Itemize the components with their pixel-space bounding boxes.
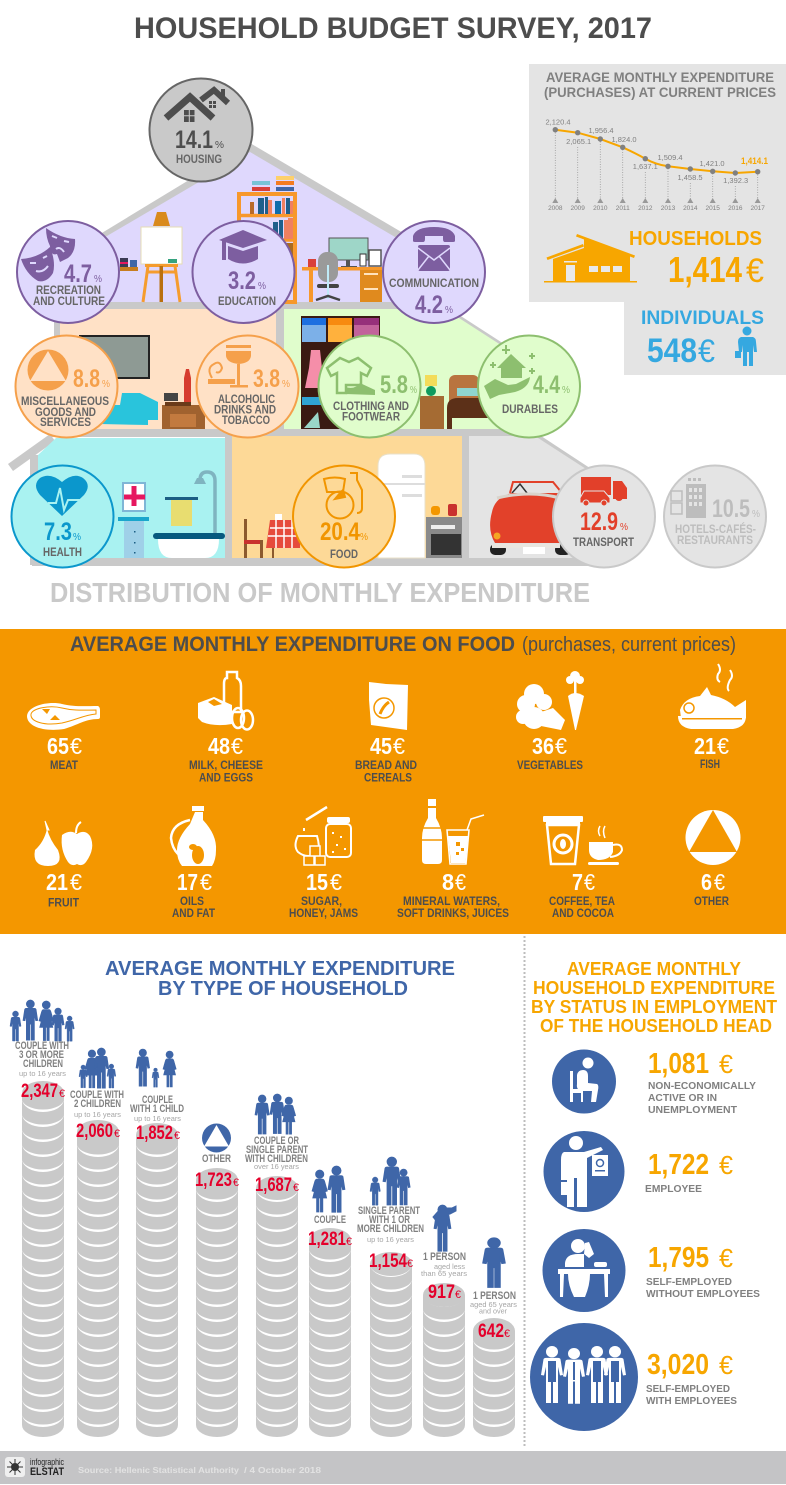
circle: alcoholic drinks and tobacco 3.8%: ALCOHOLIC bbox=[218, 394, 275, 406]
coin stack bbox=[370, 1252, 412, 1437]
line chart: 1,509.4 bbox=[657, 153, 683, 162]
employment row: self-employed with employees: WITH EMPLOYEES bbox=[646, 1395, 737, 1407]
icon: truck and car bbox=[580, 477, 627, 506]
circle: clothing and footwear 5.8%: CLOTHING AND bbox=[333, 401, 409, 413]
column: single parent with 1 or more children: 1,154 bbox=[369, 1251, 407, 1272]
employment row: non-economically active: NON-ECONOMICALLY bbox=[648, 1080, 756, 1092]
item: mineral waters, soft drinks, juices: MINERAL WATERS, bbox=[403, 894, 500, 908]
column: couple or single parent with children: 1,687 bbox=[255, 1175, 292, 1196]
column: couple: COUPLE bbox=[314, 1214, 346, 1226]
column: couple with 1 child: COUPLE bbox=[142, 1094, 173, 1106]
icon: family of five bbox=[10, 1000, 74, 1041]
column: other: OTHER bbox=[202, 1153, 231, 1165]
column: other: 1,723 bbox=[195, 1170, 232, 1191]
heading: expenditure by status in employment: AVERAGE MONTHLY bbox=[567, 958, 742, 979]
employment row: self-employed with employees bbox=[530, 1323, 737, 1431]
column: couple with 2 children: 2,060 bbox=[76, 1121, 113, 1142]
circle: alcoholic drinks and tobacco 3.8%: % bbox=[282, 379, 290, 390]
column: couple with 3 or more children: COUPLE WITH bbox=[15, 1040, 69, 1052]
item: milk, cheese and eggs: 48 bbox=[208, 733, 230, 759]
circle: transport 12.9%: 12.9 bbox=[580, 508, 618, 536]
icon: house bbox=[544, 234, 637, 282]
column: couple with 1 child bbox=[130, 1049, 184, 1437]
room: garage with car bbox=[469, 436, 600, 558]
desk with computer bbox=[302, 238, 382, 302]
item: mineral waters, soft drinks, juices: € bbox=[455, 869, 466, 895]
column: couple with 3 or more children: 2,347 bbox=[21, 1081, 58, 1102]
line chart: 1,392.3 bbox=[723, 176, 748, 185]
line chart: 1,414.1 bbox=[741, 156, 768, 166]
line chart: 2013 bbox=[661, 205, 676, 212]
circle: housing 14.1%: 14.1 bbox=[175, 126, 213, 154]
logo bbox=[5, 1457, 64, 1478]
heading: expenditure by status in employment: BY STATUS IN EMPLOYMENT bbox=[531, 996, 778, 1017]
item: other bbox=[686, 810, 740, 908]
employment row: self-employed without employees: SELF-EMPLOYED bbox=[646, 1276, 732, 1288]
line chart bbox=[545, 118, 768, 212]
item: other: OTHER bbox=[694, 894, 729, 908]
item: vegetables: € bbox=[555, 733, 567, 759]
footer bbox=[0, 1451, 786, 1484]
households figure bbox=[629, 228, 764, 290]
icon: heart with pulse bbox=[36, 476, 88, 516]
item: meat bbox=[27, 703, 100, 772]
icon: fish on plate bbox=[678, 664, 746, 729]
column: 1 person aged less than 65: € bbox=[455, 1289, 461, 1301]
item: mineral waters, soft drinks, juices: 8 bbox=[442, 869, 454, 895]
icon: parent with children bbox=[370, 1157, 410, 1205]
icon: phone and envelope bbox=[413, 227, 455, 271]
house illustration bbox=[8, 143, 602, 566]
employment row: non-economically active: 1,081 bbox=[648, 1048, 709, 1080]
heading: distribution of monthly expenditure: DISTRIBUTION OF MONTHLY EXPENDITURE bbox=[50, 577, 590, 608]
employment row: non-economically active bbox=[552, 1048, 756, 1116]
column: 1 person aged 65 and over: € bbox=[504, 1328, 510, 1340]
employment row: self-employed with employees: € bbox=[719, 1350, 734, 1380]
icon: couple bbox=[312, 1166, 345, 1212]
item: bread and cereals: € bbox=[393, 733, 405, 759]
item: coffee, tea and cocoa: 7 bbox=[572, 869, 583, 895]
item: sugar, honey, jams: € bbox=[330, 869, 342, 895]
item: oils and fat: € bbox=[200, 869, 212, 895]
column: single parent with 1 or more children: WITH 1 OR bbox=[369, 1214, 410, 1226]
icon: food items bbox=[324, 473, 362, 518]
column: single parent with 1 or more children: € bbox=[407, 1258, 413, 1270]
line chart: 2017 bbox=[750, 205, 765, 212]
circle: hotels, cafes, restaurants 10.5%: 10.5 bbox=[712, 495, 750, 523]
coin stack bbox=[309, 1228, 351, 1437]
line chart: 2010 bbox=[593, 205, 608, 212]
room: kitchen bbox=[232, 436, 462, 558]
employment row: self-employed without employees bbox=[542, 1229, 760, 1312]
icon: cup and mug bbox=[543, 816, 622, 865]
coin stack bbox=[256, 1176, 298, 1437]
employment row: employee: EMPLOYEE bbox=[645, 1183, 702, 1195]
circle: clothing and footwear 5.8% bbox=[318, 336, 420, 438]
item: fruit: FRUIT bbox=[48, 896, 80, 910]
item: fish: € bbox=[717, 733, 729, 759]
item: bread and cereals: CEREALS bbox=[364, 770, 412, 784]
column: 1 person aged less than 65: 1 PERSON bbox=[423, 1251, 466, 1263]
icon: hotel building bbox=[671, 478, 706, 518]
icon: person with badge bbox=[544, 1131, 624, 1212]
item: bread and cereals: 45 bbox=[370, 733, 392, 759]
line chart: 1,637.1 bbox=[633, 162, 658, 171]
icon: house on hand bbox=[484, 345, 535, 399]
column: couple with 3 or more children: € bbox=[59, 1088, 65, 1100]
item: fish: FISH bbox=[700, 757, 720, 771]
column: other: € bbox=[233, 1177, 239, 1189]
column: single parent with 1 or more children bbox=[357, 1157, 424, 1437]
column: 1 person aged less than 65: aged less bbox=[434, 1262, 465, 1271]
icon: triangle in circle bbox=[686, 810, 740, 865]
line chart: 1,421.0 bbox=[699, 159, 725, 168]
column: couple or single parent with children: over 16 years bbox=[254, 1162, 299, 1171]
circle: durables 4.4%: 4.4 bbox=[533, 371, 560, 399]
panel heading: AVERAGE MONTHLY EXPENDITURE bbox=[546, 70, 774, 85]
line chart: 2015 bbox=[705, 205, 720, 212]
circle: communication 4.2%: % bbox=[445, 305, 453, 316]
panel heading: (PURCHASES) AT CURRENT PRICES bbox=[544, 85, 776, 100]
circle: recreation and culture 4.7%: 4.7 bbox=[64, 260, 92, 288]
column: couple bbox=[308, 1166, 352, 1437]
item: meat: 65 bbox=[47, 733, 69, 759]
heading: expenditure by status in employment bbox=[531, 958, 778, 1036]
room: bathroom bbox=[38, 438, 225, 558]
icon: person at desk bbox=[542, 1229, 626, 1312]
icon: triangle in circle bbox=[28, 350, 68, 390]
item: meat: MEAT bbox=[50, 758, 79, 772]
employment row: self-employed with employees: SELF-EMPLOYED bbox=[646, 1383, 730, 1395]
column: couple: € bbox=[346, 1236, 352, 1248]
individuals figure bbox=[641, 308, 764, 370]
line chart: 2,120.4 bbox=[545, 118, 571, 126]
circle: miscellaneous 8.8%: GOODS AND bbox=[35, 407, 96, 419]
column: couple with 2 children: € bbox=[114, 1128, 120, 1140]
circle: miscellaneous 8.8%: MISCELLANEOUS bbox=[21, 396, 109, 408]
column: couple with 2 children: COUPLE WITH bbox=[70, 1089, 124, 1101]
roof and walls bbox=[8, 143, 602, 566]
circle: transport 12.9% bbox=[553, 466, 655, 568]
column: couple with 3 or more children: up to 16 years bbox=[19, 1069, 66, 1078]
coin stack bbox=[77, 1120, 119, 1437]
icon: wine glass and cigarette bbox=[208, 345, 251, 388]
circle: hotels, cafes, restaurants 10.5%: RESTAURANTS bbox=[677, 535, 753, 547]
heading: expenditure by type of household: BY TYPE OF HOUSEHOLD bbox=[158, 978, 408, 1000]
heading: expenditure by status in employment: OF THE HOUSEHOLD HEAD bbox=[540, 1015, 772, 1036]
line chart: 2011 bbox=[616, 205, 630, 212]
item: fruit: € bbox=[70, 869, 82, 895]
small shelf with books bbox=[120, 258, 138, 271]
column: couple with 1 child: up to 16 years bbox=[134, 1114, 181, 1123]
heading: expenditure by status in employment: HOUSEHOLD EXPENDITURE bbox=[533, 977, 775, 998]
circle: housing 14.1%: % bbox=[215, 140, 224, 151]
households figure: € bbox=[746, 252, 764, 290]
column: single parent with 1 or more children: SINGLE PARENT bbox=[358, 1205, 420, 1217]
item: milk, cheese and eggs: AND EGGS bbox=[199, 770, 253, 784]
room: living room bbox=[60, 309, 276, 429]
circle: housing 14.1%: HOUSING bbox=[176, 154, 222, 166]
room: attic bbox=[66, 152, 424, 302]
circle: communication 4.2% bbox=[383, 221, 485, 323]
icon: graduation cap bbox=[219, 230, 267, 264]
coin stack bbox=[473, 1318, 515, 1437]
item: fruit bbox=[35, 821, 92, 910]
households figure: 1,414 bbox=[668, 249, 742, 290]
icon: cauliflower and carrot bbox=[516, 671, 584, 730]
icon: bottle and glass bbox=[422, 799, 484, 864]
column: couple with 1 child: WITH 1 CHILD bbox=[130, 1103, 184, 1115]
column: single parent with 1 or more children: MORE CHILDREN bbox=[357, 1223, 424, 1235]
individuals figure: INDIVIDUALS bbox=[641, 308, 764, 329]
circle: health 7.3% bbox=[12, 466, 114, 568]
icon: older person bbox=[483, 1238, 505, 1287]
item: bread and cereals: BREAD AND bbox=[355, 758, 417, 772]
logo: ELSTAT bbox=[30, 1466, 64, 1478]
item: sugar, honey, jams: SUGAR, bbox=[301, 894, 342, 908]
coin stack bbox=[22, 1081, 64, 1437]
line chart: 2009 bbox=[570, 205, 585, 212]
line chart: 2014 bbox=[683, 205, 698, 212]
column: couple with 1 child: 1,852 bbox=[136, 1123, 173, 1144]
icon: oil bottle bbox=[171, 806, 216, 866]
employment row: self-employed without employees: WITHOUT EMPLOYEES bbox=[646, 1288, 760, 1300]
circle: education 3.2%: EDUCATION bbox=[218, 296, 276, 308]
item: coffee, tea and cocoa: AND COCOA bbox=[552, 906, 614, 920]
item: mineral waters, soft drinks, juices bbox=[397, 799, 509, 920]
item: other: 6 bbox=[701, 869, 712, 895]
column: 1 person aged less than 65 bbox=[421, 1205, 467, 1437]
item: meat: € bbox=[70, 733, 82, 759]
line chart: 1,458.5 bbox=[677, 173, 703, 182]
item: fish bbox=[678, 664, 746, 771]
icon: employer with staff bbox=[530, 1323, 638, 1431]
circle: clothing and footwear 5.8%: 5.8 bbox=[380, 371, 408, 399]
icon: adults with grown child bbox=[255, 1094, 296, 1134]
icon: family of four bbox=[79, 1048, 116, 1088]
circle: alcoholic drinks and tobacco 3.8%: TOBACCO bbox=[222, 415, 270, 427]
column: other bbox=[195, 1124, 239, 1437]
line chart: 1,956.4 bbox=[588, 126, 614, 135]
column: couple: 1,281 bbox=[308, 1229, 346, 1250]
icon: person with camera bbox=[433, 1205, 456, 1251]
circle: hotels, cafes, restaurants 10.5% bbox=[664, 466, 766, 568]
circle: durables 4.4%: % bbox=[562, 385, 570, 396]
item: milk, cheese and eggs bbox=[189, 672, 263, 784]
circle: durables 4.4% bbox=[478, 336, 580, 438]
source line: Source: Hellenic Statistical Authority bbox=[78, 1465, 239, 1475]
item: vegetables: 36 bbox=[532, 733, 554, 759]
circle: alcoholic drinks and tobacco 3.8%: 3.8 bbox=[253, 365, 280, 393]
line chart: 1,824.0 bbox=[611, 135, 637, 144]
column: couple with 1 child: € bbox=[174, 1130, 180, 1142]
circle: health 7.3%: % bbox=[73, 532, 81, 543]
circle: transport 12.9%: % bbox=[620, 522, 628, 533]
circle: clothing and footwear 5.8%: % bbox=[410, 385, 417, 396]
circle: housing 14.1% bbox=[150, 78, 252, 182]
easel bbox=[141, 212, 182, 302]
circle: food 20.4%: FOOD bbox=[330, 549, 358, 561]
column: couple or single parent with children: WITH CHILDREN bbox=[245, 1153, 308, 1165]
column: 1 person aged 65 and over bbox=[470, 1238, 517, 1437]
source line bbox=[78, 1465, 321, 1475]
circle: hotels, cafes, restaurants 10.5%: HOTELS-CAFÉS- bbox=[675, 523, 756, 536]
circle: food 20.4%: 20.4 bbox=[320, 518, 360, 546]
icon: honey, jam and sugar cubes bbox=[296, 807, 351, 865]
item: sugar, honey, jams bbox=[289, 807, 358, 920]
item: coffee, tea and cocoa: € bbox=[584, 869, 595, 895]
column: 1 person aged less than 65: 917 bbox=[428, 1282, 455, 1303]
column: 1 person aged 65 and over: and over bbox=[479, 1306, 507, 1316]
title: HOUSEHOLD BUDGET SURVEY, 2017 bbox=[134, 12, 652, 45]
circle: alcoholic drinks and tobacco 3.8%: DRINKS AND bbox=[214, 404, 276, 416]
employment row: employee: € bbox=[719, 1150, 734, 1180]
heading: expenditure by type of household: AVERAGE MONTHLY EXPENDITURE bbox=[105, 958, 455, 980]
item: fruit: 21 bbox=[46, 869, 68, 895]
column: single parent with 1 or more children: up to 16 years bbox=[367, 1235, 414, 1244]
panel heading bbox=[544, 70, 776, 100]
item: mineral waters, soft drinks, juices: SOFT DRINKS, JUICES bbox=[397, 906, 509, 920]
food heading: AVERAGE MONTHLY EXPENDITURE ON FOOD bbox=[70, 633, 515, 656]
item: oils and fat: 17 bbox=[177, 869, 198, 895]
circle: miscellaneous 8.8% bbox=[16, 336, 118, 438]
room: bedroom bbox=[284, 309, 504, 429]
column: couple with 2 children bbox=[70, 1048, 124, 1437]
circle: clothing and footwear 5.8%: FOOTWEAR bbox=[342, 412, 401, 424]
column: couple with 2 children: up to 16 years bbox=[74, 1110, 121, 1119]
employment row: self-employed without employees: € bbox=[719, 1243, 734, 1273]
circle: communication 4.2%: COMMUNICATION bbox=[389, 278, 479, 290]
individuals figure: € bbox=[698, 333, 715, 369]
column: couple or single parent with children bbox=[245, 1094, 308, 1437]
circle: health 7.3%: HEALTH bbox=[43, 547, 82, 559]
item: oils and fat: OILS bbox=[180, 894, 204, 908]
employment row: self-employed without employees: 1,795 bbox=[648, 1242, 709, 1274]
employment row: self-employed with employees: 3,020 bbox=[647, 1349, 709, 1381]
line chart: 2016 bbox=[728, 205, 743, 212]
column: 1 person aged 65 and over: 642 bbox=[478, 1321, 504, 1342]
circle: education 3.2%: % bbox=[258, 281, 266, 292]
households figure: HOUSEHOLDS bbox=[629, 228, 762, 250]
item: milk, cheese and eggs: MILK, CHEESE bbox=[189, 758, 263, 772]
coin stack bbox=[196, 1168, 238, 1437]
circle: food 20.4%: % bbox=[360, 532, 368, 543]
column: couple or single parent with children: SINGLE PARENT bbox=[246, 1144, 308, 1156]
icon: milk, cheese and eggs bbox=[198, 672, 253, 730]
circle: miscellaneous 8.8%: SERVICES bbox=[40, 417, 91, 429]
circle: recreation and culture 4.7%: RECREATION bbox=[36, 285, 101, 297]
column: 1 person aged 65 and over: aged 65 years bbox=[470, 1300, 517, 1309]
icon: pear and apple bbox=[35, 821, 92, 866]
column: 1 person aged 65 and over: 1 PERSON bbox=[473, 1290, 516, 1302]
circle: recreation and culture 4.7%: % bbox=[94, 274, 102, 285]
line chart: 2008 bbox=[548, 205, 563, 212]
line chart: 2012 bbox=[638, 205, 653, 212]
individuals figure: 548 bbox=[647, 332, 697, 370]
heading: expenditure by type of household bbox=[105, 958, 455, 1000]
panel: average monthly expenditure trend bbox=[529, 64, 786, 375]
icon: shirt and shoe bbox=[327, 358, 375, 395]
column: 1 person aged less than 65: than 65 years bbox=[421, 1269, 467, 1278]
employment row: non-economically active: UNEMPLOYMENT bbox=[648, 1104, 738, 1116]
circle: alcoholic drinks and tobacco 3.8% bbox=[196, 336, 298, 438]
column: couple or single parent with children: COUPLE OR bbox=[254, 1135, 299, 1147]
column: couple or single parent with children: € bbox=[293, 1182, 299, 1194]
circle: miscellaneous 8.8%: 8.8 bbox=[73, 365, 100, 393]
panel: food expenditure bbox=[0, 629, 786, 934]
icon: theatre masks bbox=[21, 228, 75, 281]
circle: food 20.4% bbox=[293, 466, 395, 568]
line chart: 2,065.1 bbox=[566, 137, 591, 146]
icon: seated person bbox=[552, 1050, 616, 1114]
item: vegetables: VEGETABLES bbox=[517, 758, 583, 772]
item: vegetables bbox=[516, 671, 584, 772]
binders bbox=[252, 176, 294, 191]
item: bread and cereals bbox=[355, 682, 417, 784]
circle: education 3.2%: 3.2 bbox=[228, 267, 256, 295]
item: coffee, tea and cocoa: COFFEE, TEA bbox=[549, 894, 615, 908]
item: sugar, honey, jams: HONEY, JAMS bbox=[289, 906, 358, 920]
circle: transport 12.9%: TRANSPORT bbox=[573, 537, 634, 549]
column: couple with 3 or more children: 3 OR MORE bbox=[19, 1049, 64, 1061]
logo: infographic bbox=[30, 1457, 64, 1467]
column: couple with 3 or more children: CHILDREN bbox=[23, 1058, 63, 1070]
source line: / 4 October 2018 bbox=[244, 1465, 321, 1475]
column: couple with 2 children: 2 CHILDREN bbox=[74, 1098, 121, 1110]
item: oils and fat bbox=[171, 806, 216, 920]
circle: durables 4.4%: DURABLES bbox=[502, 404, 558, 416]
employment row: non-economically active: € bbox=[719, 1049, 734, 1079]
food heading: (purchases, current prices) bbox=[522, 634, 736, 656]
icon: roofs bbox=[166, 89, 228, 122]
item: other: € bbox=[714, 869, 725, 895]
icon: steak bbox=[27, 703, 100, 730]
item: milk, cheese and eggs: € bbox=[231, 733, 243, 759]
item: sugar, honey, jams: 15 bbox=[306, 869, 328, 895]
circle: miscellaneous 8.8%: % bbox=[102, 379, 110, 390]
employment row: employee bbox=[544, 1131, 734, 1212]
circle: health 7.3%: 7.3 bbox=[44, 518, 72, 546]
circle: recreation and culture 4.7%: AND CULTURE bbox=[33, 296, 105, 308]
icon: triangle in circle bbox=[202, 1124, 231, 1152]
icon: person with briefcase bbox=[735, 326, 757, 366]
circle: communication 4.2%: 4.2 bbox=[415, 291, 443, 319]
circle: education 3.2% bbox=[192, 221, 294, 323]
item: oils and fat: AND FAT bbox=[172, 906, 216, 920]
column: couple with 3 or more children bbox=[10, 1000, 74, 1437]
icon: cereal box bbox=[369, 682, 408, 730]
coin stack bbox=[136, 1123, 178, 1437]
employment row: non-economically active: ACTIVE OR IN bbox=[648, 1092, 717, 1104]
coin stack bbox=[423, 1283, 465, 1437]
bookcase bbox=[239, 194, 295, 302]
circle: hotels, cafes, restaurants 10.5%: % bbox=[752, 509, 760, 520]
item: fish: 21 bbox=[694, 733, 716, 759]
icon: family of three bbox=[136, 1049, 176, 1087]
item: coffee, tea and cocoa bbox=[543, 816, 622, 920]
circle: recreation and culture 4.7% bbox=[17, 221, 119, 323]
employment row: employee: 1,722 bbox=[648, 1149, 709, 1181]
